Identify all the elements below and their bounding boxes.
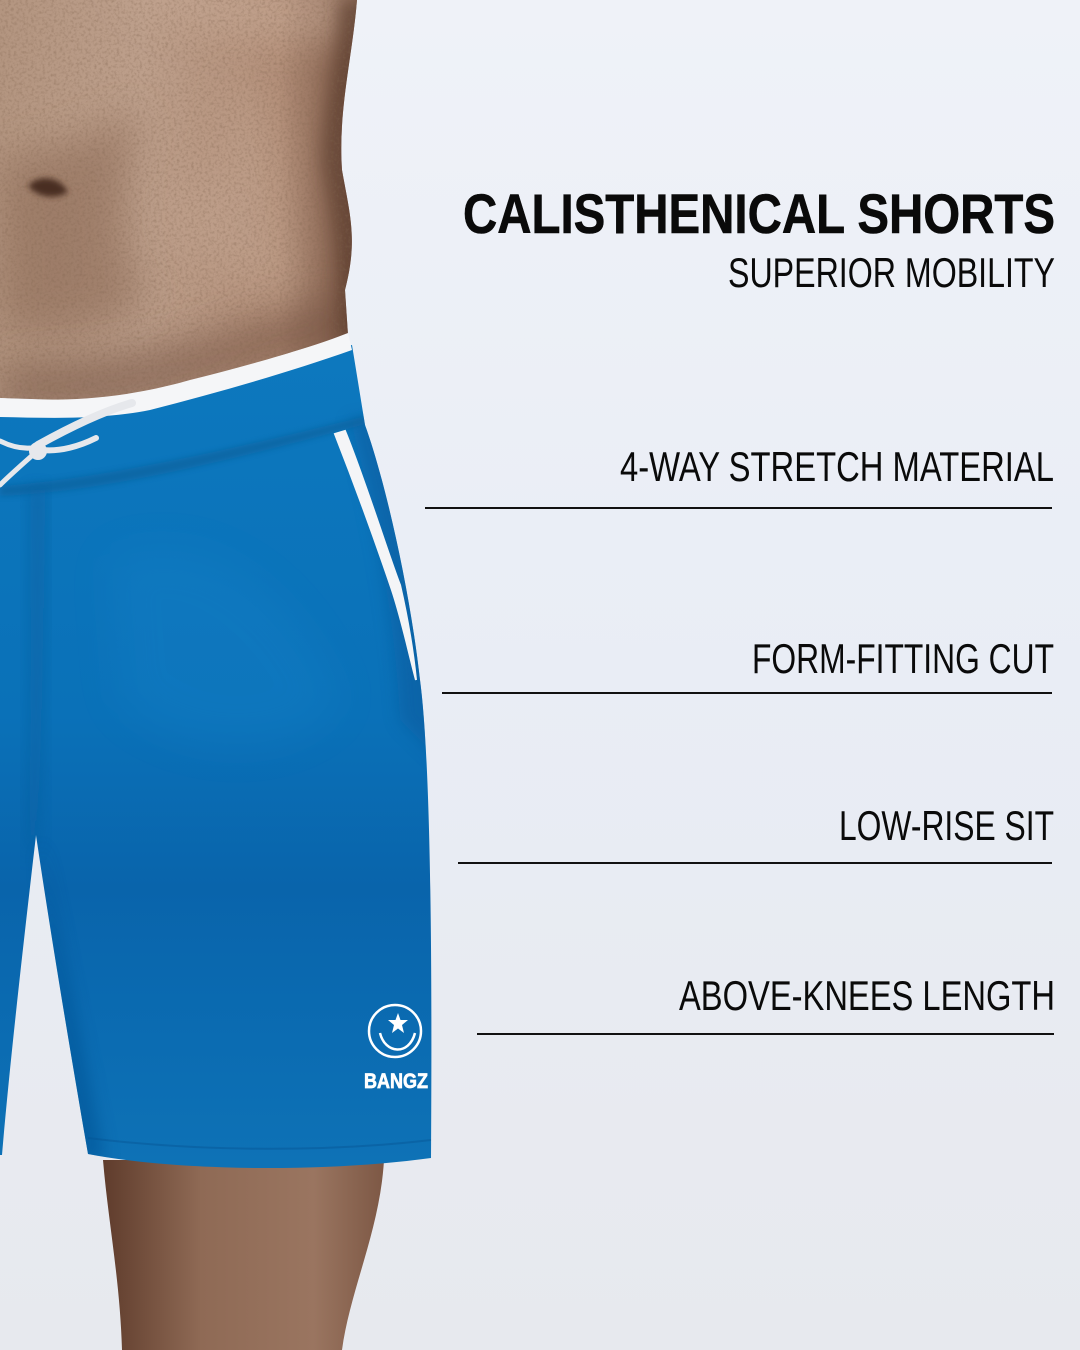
hem stitching: [88, 1138, 431, 1149]
blue shorts: [0, 333, 440, 1168]
white side piping: [335, 431, 416, 680]
hem shade: [45, 896, 105, 1157]
waistband shadow: [0, 416, 366, 496]
white waistband trim: [0, 333, 352, 418]
centre highlight: [110, 549, 340, 745]
crotch and seam shading: [28, 496, 47, 846]
logo: BANGZ: [364, 1070, 428, 1093]
drawstring: [0, 403, 132, 485]
logo: [364, 1005, 428, 1093]
abdominal shading: [0, 110, 150, 336]
model torso: [0, 0, 370, 410]
navel: [28, 178, 68, 197]
right side shading: [352, 416, 426, 750]
model leg: [103, 1160, 384, 1350]
